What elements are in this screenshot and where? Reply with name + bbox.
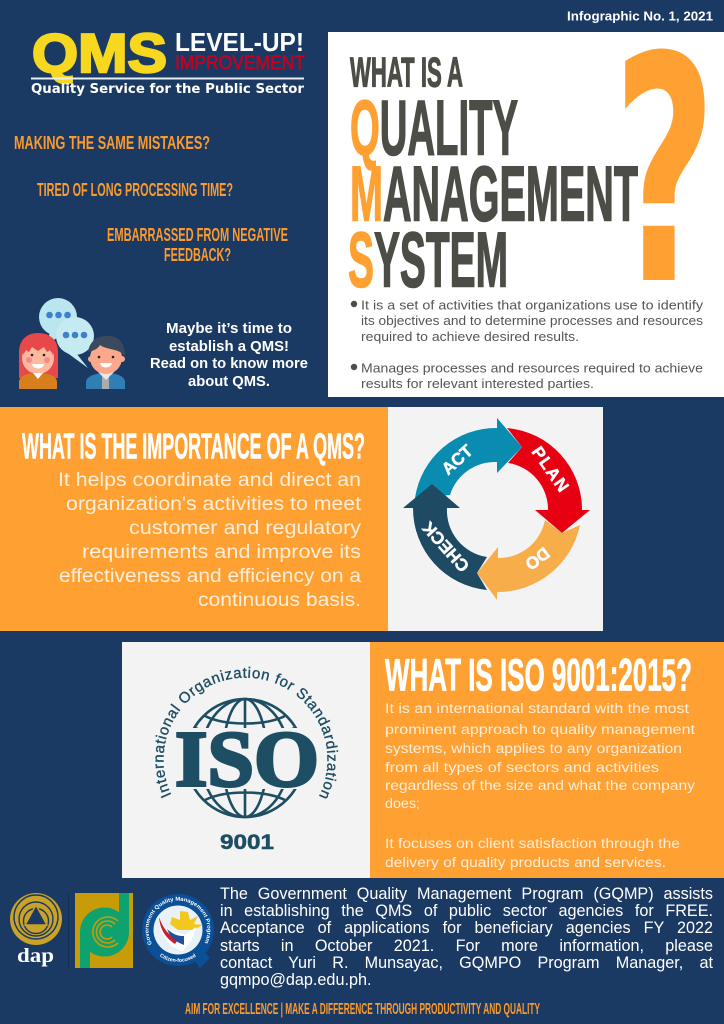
questions: FEEDBACK? <box>164 245 231 265</box>
bullet points: results for relevant interested parties. <box>361 376 594 391</box>
ISO body text: It focuses on client satisfaction through the <box>385 836 680 851</box>
ISO body text: It is an international standard with the most <box>385 701 689 716</box>
logo: QMS Level-Up: LEVEL-UP! <box>175 27 304 57</box>
program information text: in establishing the QMS of public sector agencies for FREE. <box>220 902 713 920</box>
logo: DAP: dap <box>17 945 54 967</box>
call to action text: Maybe it’s time to <box>166 321 292 337</box>
ISO body text: from all types of sectors and activities <box>385 760 659 775</box>
program information text: starts in October 2021. For more information, please <box>220 937 713 955</box>
big question mark: ? <box>613 0 716 354</box>
icon: two people talking <box>19 298 125 389</box>
PDCA labels: ACT <box>438 441 477 479</box>
logo: GQMP seal <box>142 894 214 968</box>
heading: what is a quality management system: WHAT IS A <box>350 48 463 96</box>
call to action text <box>150 321 308 390</box>
logo: green and gold square <box>68 893 133 968</box>
globe <box>186 699 304 817</box>
importance body text <box>58 470 362 611</box>
logo: QMS Level-Up: IMPROVEMENT <box>175 53 305 74</box>
PDCA labels: DO <box>521 543 553 574</box>
panel: PDCA cycle <box>388 407 603 631</box>
program information text <box>220 885 713 989</box>
program information text: gqmpo@dap.edu.ph. <box>220 971 371 989</box>
bullet points: It is a set of activities that organizations use to identify <box>361 298 704 312</box>
panel: what is ISO 9001 <box>370 642 724 878</box>
arrow: act <box>415 418 522 498</box>
ISO letters: ISO <box>175 716 319 804</box>
heading: what is a quality management system: SYSTEM <box>348 216 508 304</box>
bullet points: Manages processes and resources required to achieve <box>361 360 703 376</box>
logo: GQMP seal: Government Quality Management Program <box>146 896 210 945</box>
bullet points: its objectives and to determine processes and resources <box>361 313 704 328</box>
ISO body text: systems, which applies to any organization <box>385 741 682 756</box>
questions: MAKING THE SAME MISTAKES? <box>14 133 210 153</box>
arrow: do <box>477 520 580 600</box>
call to action text: about QMS. <box>188 374 270 390</box>
curved organization name <box>163 678 328 795</box>
logo: DAP <box>10 893 62 967</box>
ISO body text <box>385 701 695 870</box>
questions: TIRED OF LONG PROCESSING TIME? <box>37 180 233 200</box>
arrow: plan <box>507 428 590 533</box>
logo: QMS Level-Up: QMS <box>32 22 167 84</box>
panel: ISO logo: International Organization for Standardization <box>155 666 338 798</box>
importance body text: organization's activities to meet <box>66 494 362 515</box>
logo: GQMP seal: Citizen-focused <box>160 953 196 962</box>
questions <box>14 133 288 265</box>
program information text: contact Yuri R. Munsayac, GQMPO Program Manager, at <box>220 954 713 972</box>
importance body text: effectiveness and efficiency on a <box>59 566 361 587</box>
panel: what is a QMS <box>328 0 724 397</box>
importance body text: requirements and improve its <box>82 542 361 563</box>
logo: QMS Level-Up: Quality Service for the Public Sector <box>31 82 305 97</box>
PDCA labels: CHECK <box>418 517 473 575</box>
panel: importance of a QMS: WHAT IS THE IMPORTANCE OF A QMS? <box>22 426 365 466</box>
program information text: Acceptance of applications for beneficiary agencies FY 2022 <box>220 919 713 937</box>
PDCA labels <box>418 441 573 575</box>
heading: what is a quality management system <box>348 48 638 304</box>
program information text: The Government Quality Management Program (GQMP) assists <box>220 885 713 903</box>
PDCA labels: PLAN <box>528 443 573 497</box>
heading: what is a quality management system: QUALITY <box>350 84 518 172</box>
importance body text: continuous basis. <box>198 590 361 611</box>
questions: EMBARRASSED FROM NEGATIVE <box>107 225 288 245</box>
bullet points: required to achieve desired results. <box>361 329 579 344</box>
call to action text: Read on to know more <box>150 356 308 372</box>
logo: QMS Level-Up <box>31 22 305 97</box>
ISO body text: prominent approach to quality management <box>385 722 695 737</box>
arrow: check <box>403 484 487 590</box>
ISO body text: regardless of the size and what the company <box>385 778 695 793</box>
importance body text: customer and regulatory <box>129 518 362 539</box>
call to action text: establish a QMS! <box>169 339 289 355</box>
bullet points <box>351 298 704 391</box>
importance body text: It helps coordinate and direct an <box>58 470 361 491</box>
panel: ISO logo <box>122 642 370 878</box>
9001 label: 9001 <box>220 831 274 854</box>
ISO body text: delivery of quality products and services. <box>385 855 666 870</box>
issue label: Infographic No. 1, 2021 <box>567 10 713 24</box>
ISO body text: does; <box>385 796 420 811</box>
panel: importance of a QMS <box>0 407 388 631</box>
